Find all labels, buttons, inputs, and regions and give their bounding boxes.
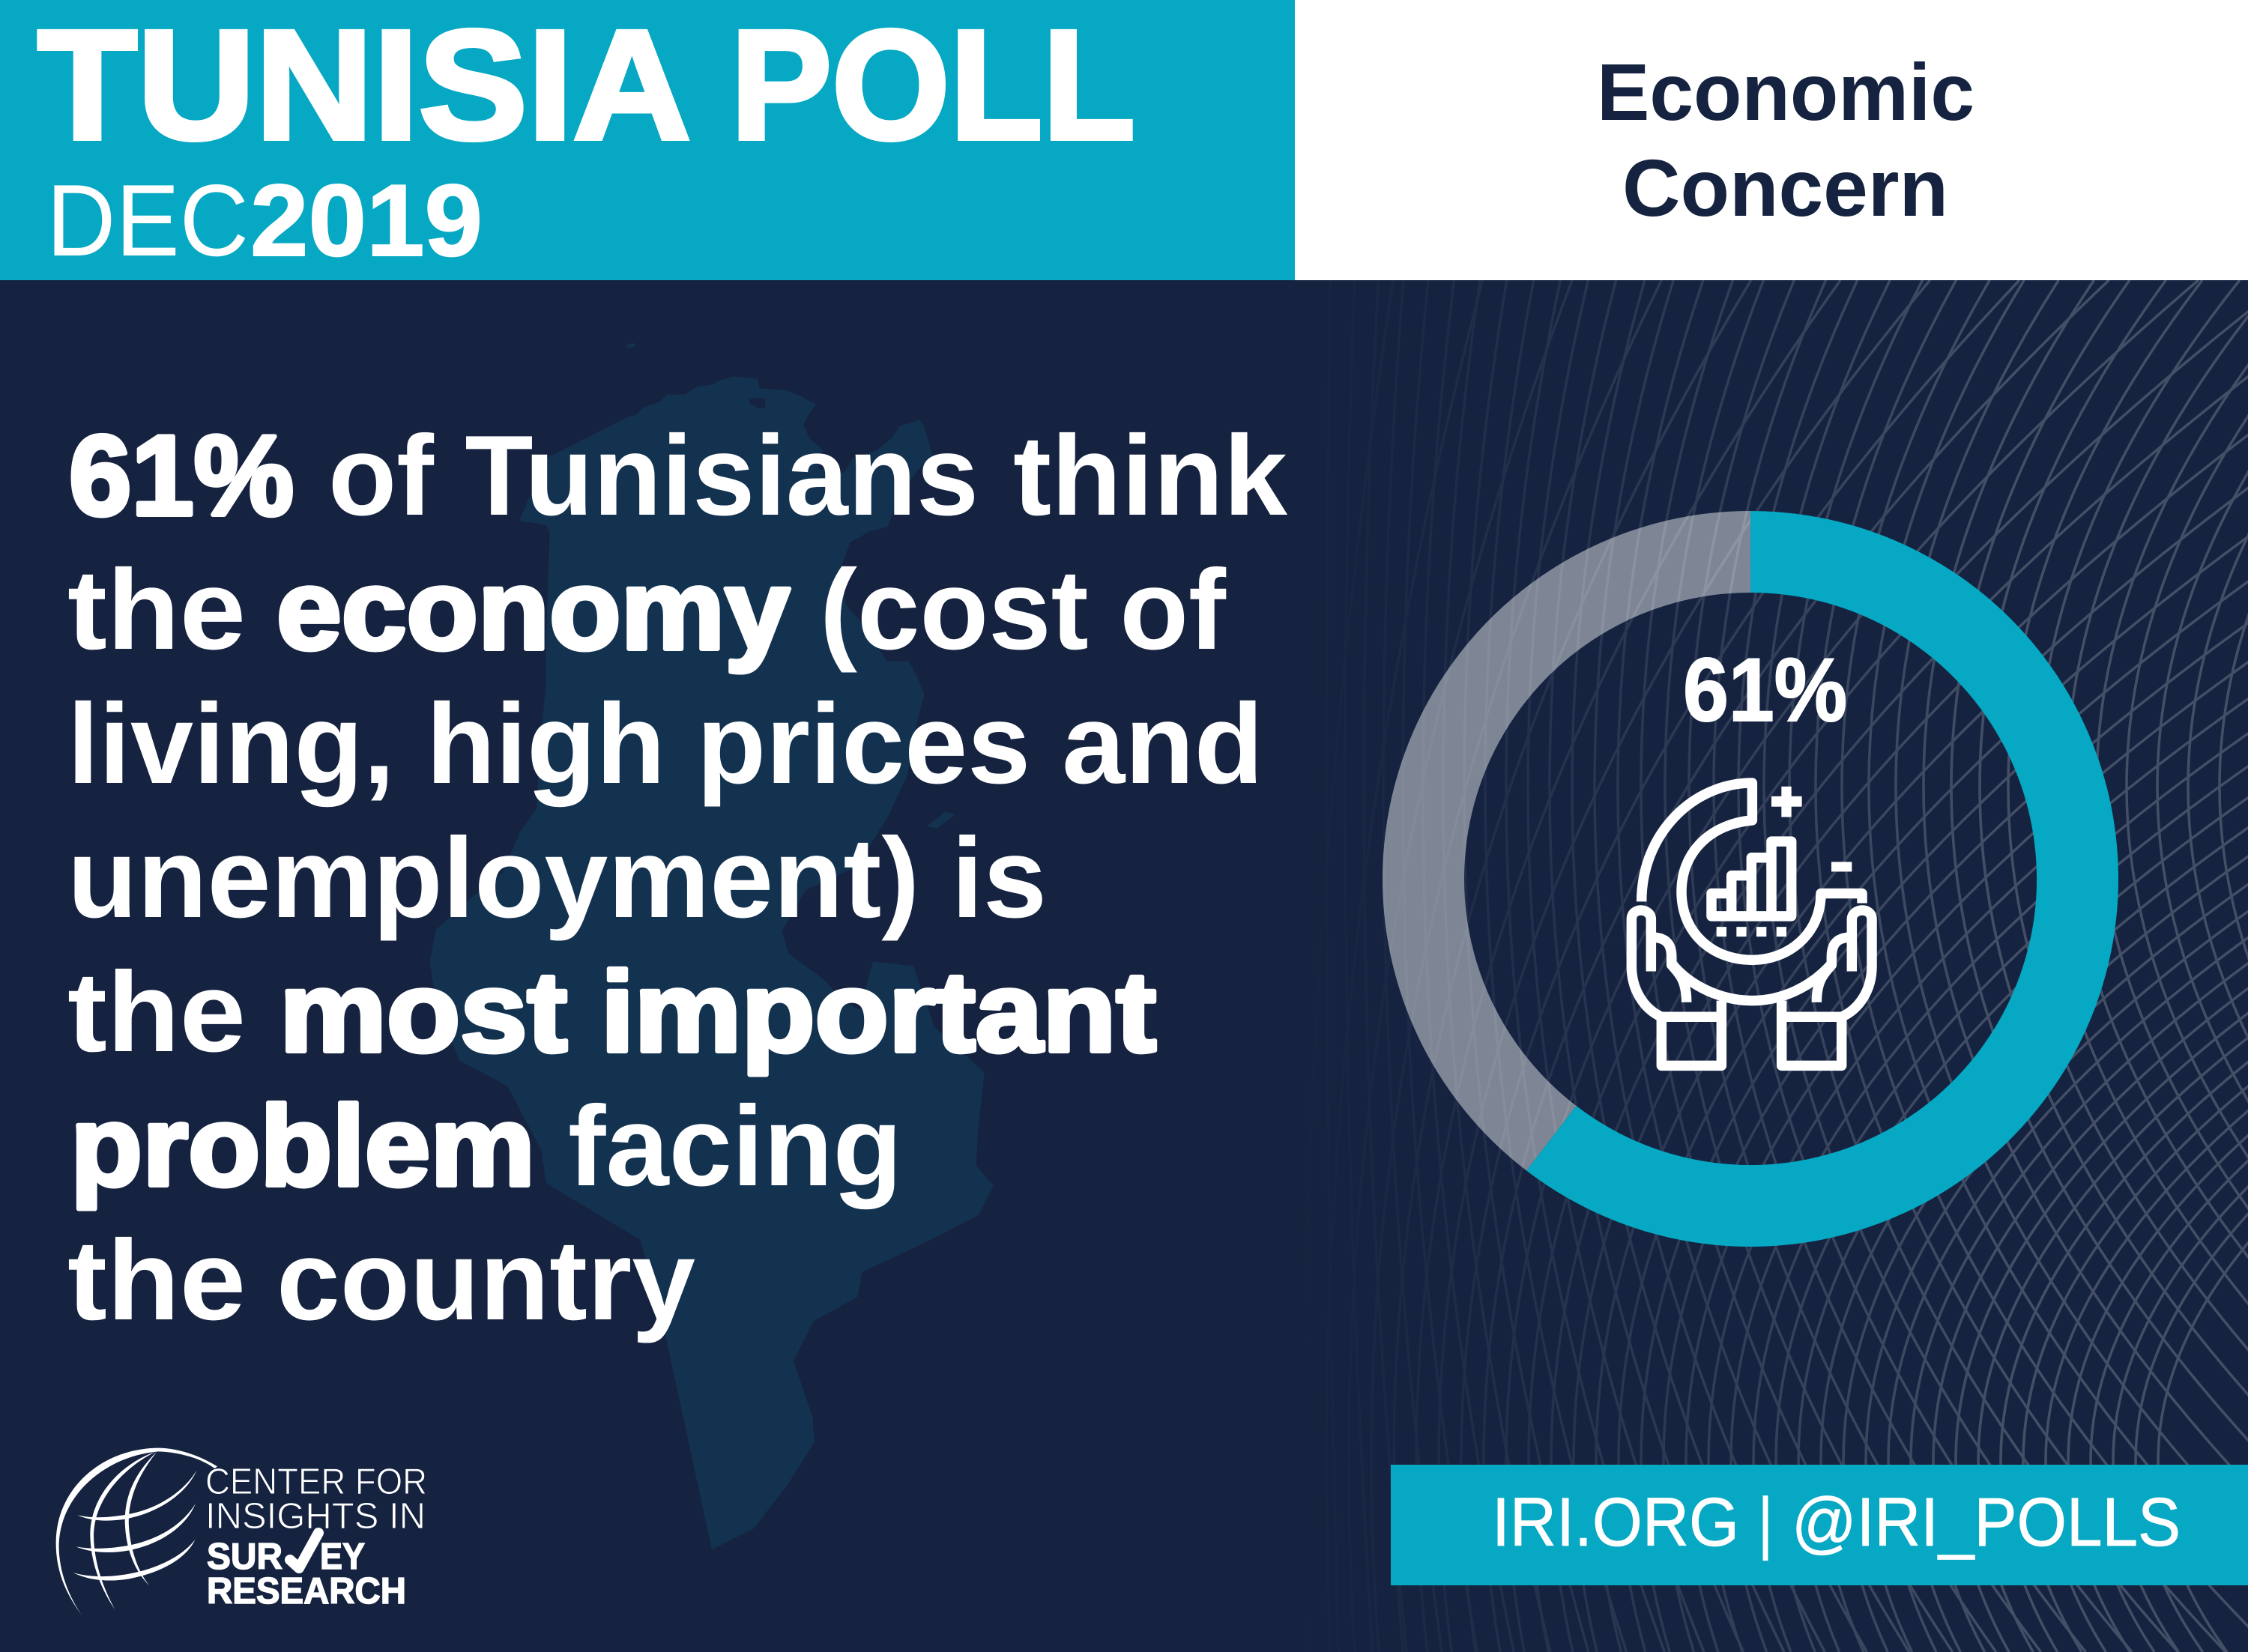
donut segment: remaining [1424,551,1750,1138]
wave line pattern [1434,280,2248,1652]
main statement text: economy [277,546,790,674]
icon: hands holding economy chart [1631,783,1872,1065]
donut segment: 61 percent [1551,551,2078,1206]
topic label: Economic [1597,46,1974,137]
header panel: title [0,0,1295,280]
logo check mark [290,1533,318,1568]
footer banner: website and handle [1391,1465,2248,1585]
logo text: RESEARCH [207,1571,406,1612]
main statement text: most important [280,948,1156,1076]
main statement text: facing [568,1083,902,1210]
logo text: EY [320,1537,365,1577]
topic label: Concern [1622,142,1948,233]
logo text [205,1462,427,1612]
logo globe [56,1448,217,1616]
title: Tunisia Poll: POLL [731,0,1135,172]
main statement text: the [67,546,246,674]
main statement text: think [1013,412,1287,539]
date: Dec 2019: DEC [46,163,249,277]
main statement text: the [67,1217,246,1344]
logo text: INSIGHTS IN [205,1496,426,1537]
banner text: IRI.ORG [1492,1484,1739,1561]
donut value: 61% [1683,640,1847,740]
main statement text: problem [70,1083,535,1210]
donut chart: 61 percent [1424,551,2078,1206]
map of Tunisia [431,344,992,1548]
logo text: CENTER FOR [205,1462,427,1502]
title: Tunisia Poll: TUNISIA [37,0,691,172]
banner text [1492,1484,2181,1561]
main statement text: (cost of [820,546,1226,674]
banner text: @IRI_POLLS [1792,1484,2181,1561]
main statement text: the [67,948,246,1076]
main statement text: of Tunisians [328,412,979,539]
topic label [1597,46,1974,233]
logo text: SUR [207,1537,282,1577]
header panel: topic [1295,0,2248,280]
banner text: | [1758,1484,1773,1561]
main statement text: unemployment) is [67,814,1047,942]
date: Dec 2019: 2019 [250,163,483,277]
main statement text: 61% [69,412,294,539]
logo: Center for Insights in Survey Research [56,1448,427,1616]
date: Dec 2019 [46,163,483,277]
main statement text: country [277,1217,695,1344]
main statement text [67,412,1287,1344]
title: Tunisia Poll [37,0,1135,172]
main statement text: living, high prices and [67,680,1263,808]
